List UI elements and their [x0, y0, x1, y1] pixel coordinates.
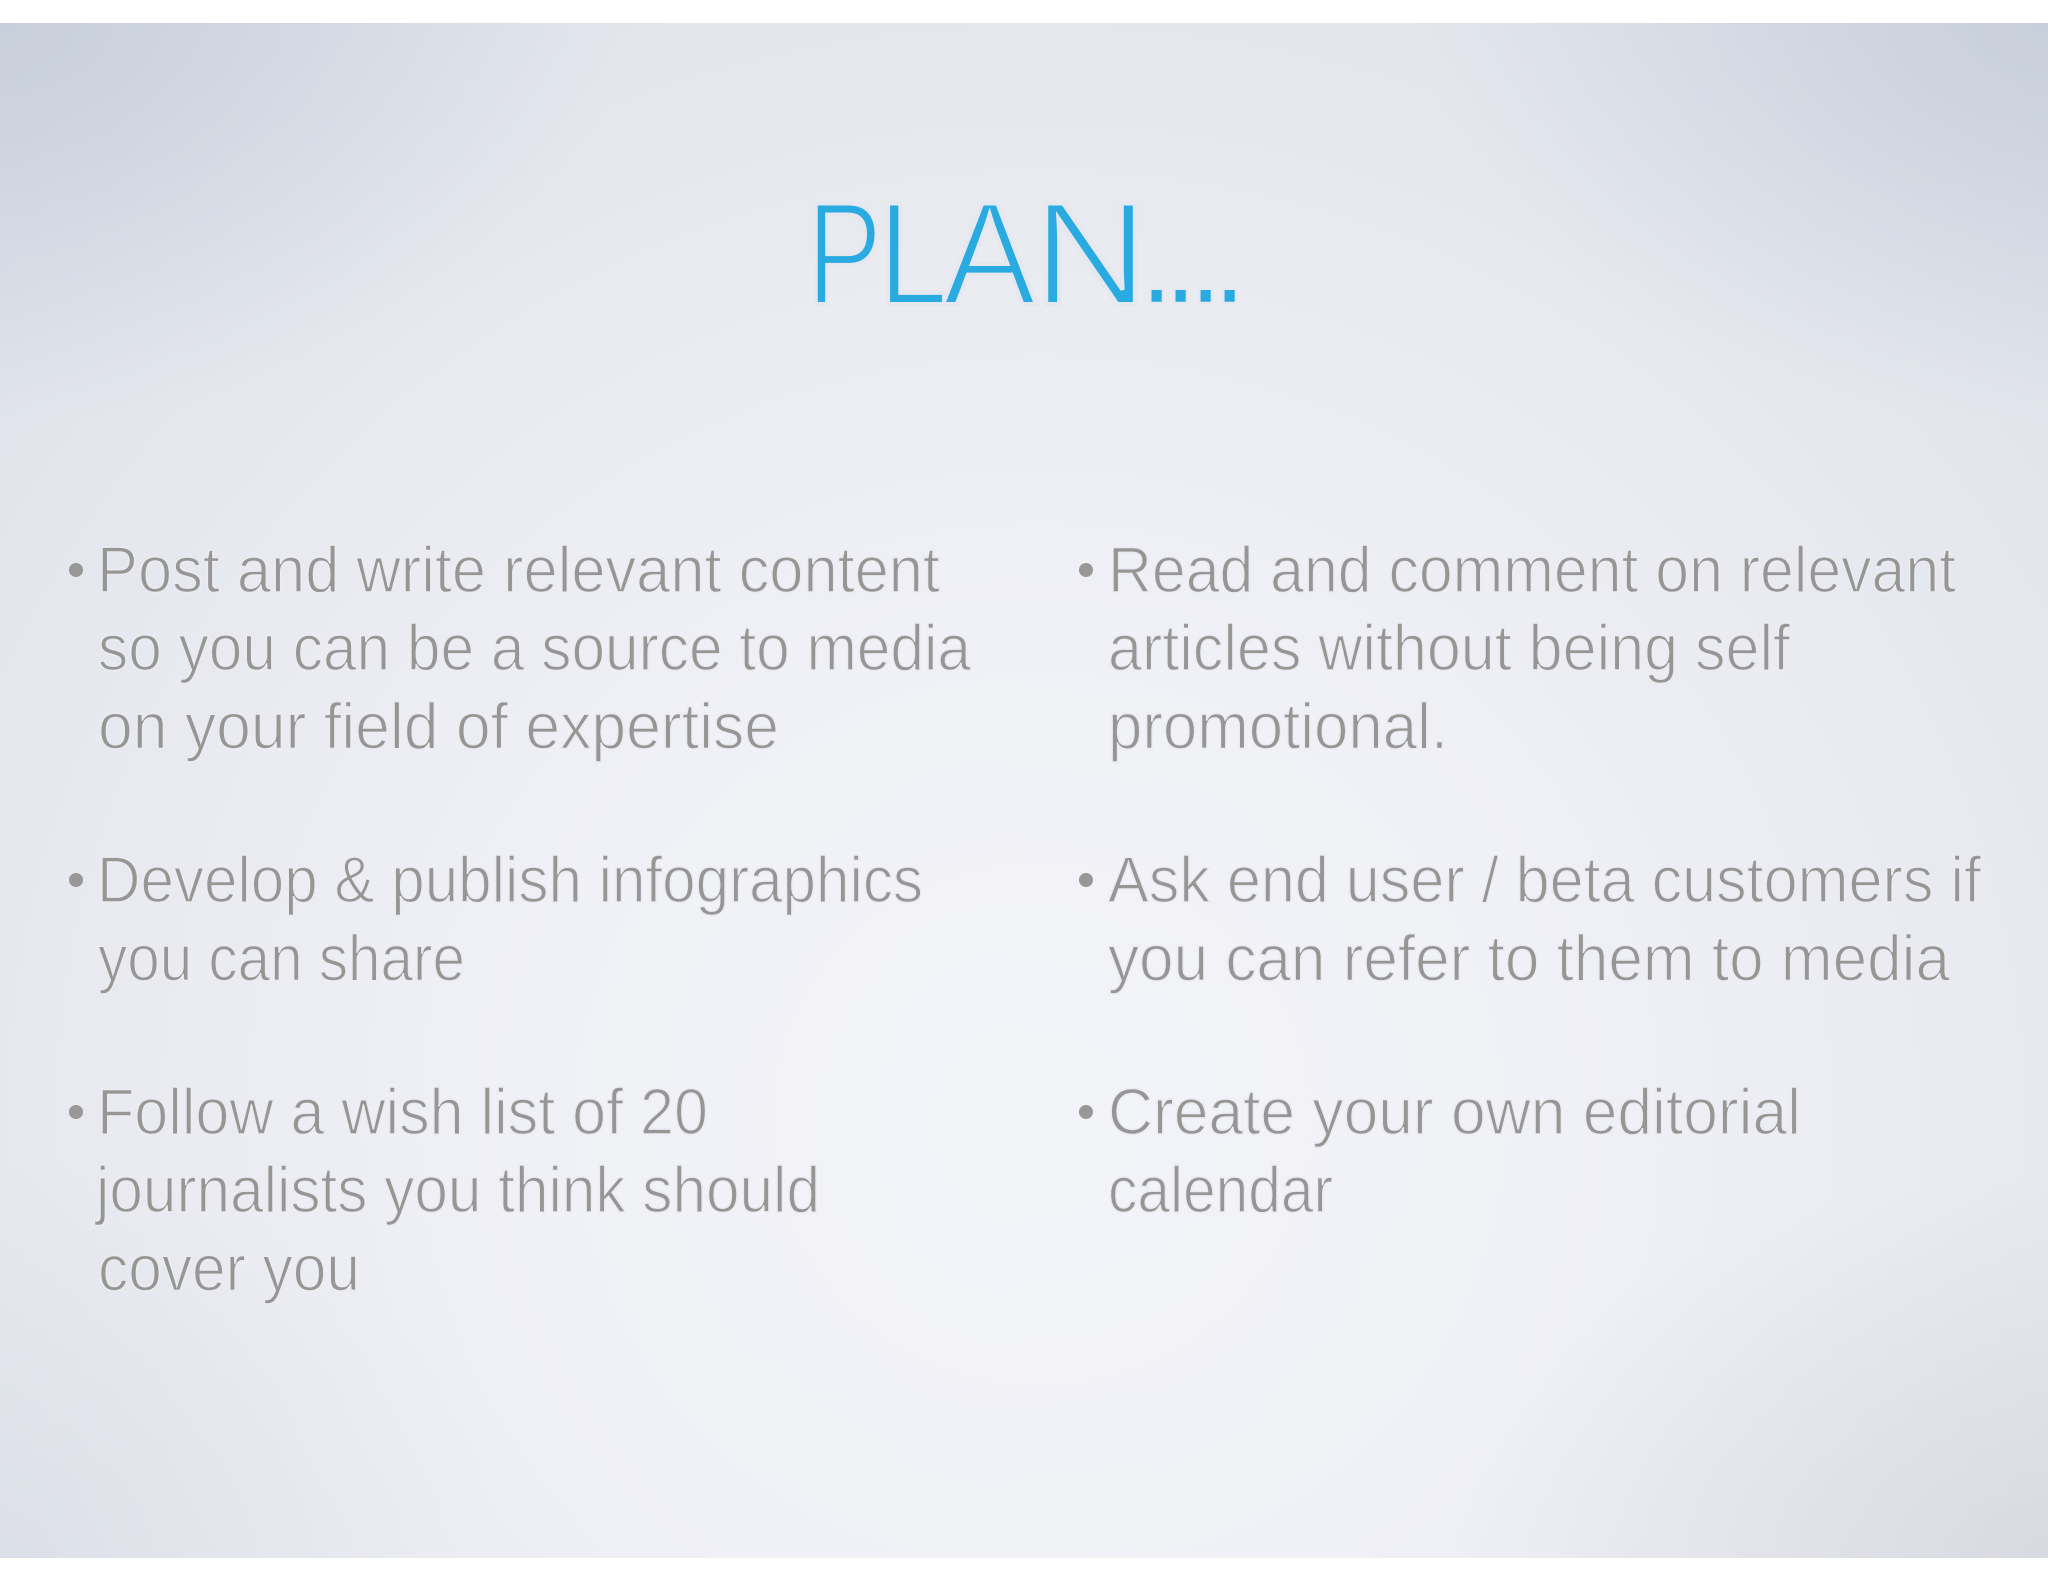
- bullet: read and comment: articles without being self: [1108, 611, 1791, 684]
- bullet: journalist wish list: journalists you think should: [94, 1153, 820, 1226]
- title: ....: [1138, 183, 1248, 332]
- bullet: develop infographics: you can share: [98, 922, 465, 994]
- bullet: read and comment: Read and comment on relevant: [1108, 533, 1956, 606]
- bullet: journalist wish list: cover you: [98, 1232, 360, 1304]
- panel: right column: [1079, 533, 1982, 1226]
- bullet: journalist wish list: [69, 1075, 820, 1304]
- title: L: [878, 172, 948, 335]
- bullet: develop infographics: [69, 843, 923, 994]
- bullet: editorial calendar: Create your own editorial: [1108, 1075, 1801, 1148]
- bullet: editorial calendar: calendar: [1108, 1153, 1333, 1226]
- title: A: [943, 172, 1037, 335]
- bullet: post and write content: on your field of expertise: [98, 690, 779, 762]
- bullet: ask beta customers: Ask end user / beta customers if: [1108, 843, 1982, 916]
- bullet: post and write content: so you can be a source to media: [98, 611, 972, 684]
- bullet: develop infographics: Develop & publish infographics: [97, 843, 923, 916]
- bullet: ask beta customers: [1079, 843, 1982, 994]
- title: N: [1033, 172, 1148, 335]
- panel: left column: [69, 533, 972, 1304]
- bullet: post and write content: [69, 533, 972, 762]
- bullet: read and comment: promotional.: [1108, 690, 1448, 762]
- title: P: [807, 172, 882, 335]
- bullet: editorial calendar: [1079, 1075, 1801, 1226]
- bullet: ask beta customers: you can refer to them to media: [1108, 922, 1951, 994]
- bullet: read and comment: [1079, 533, 1956, 762]
- title: [807, 172, 1248, 335]
- bullet: post and write content: Post and write relevant content: [97, 533, 940, 606]
- bullet: journalist wish list: Follow a wish list of 20: [97, 1075, 708, 1148]
